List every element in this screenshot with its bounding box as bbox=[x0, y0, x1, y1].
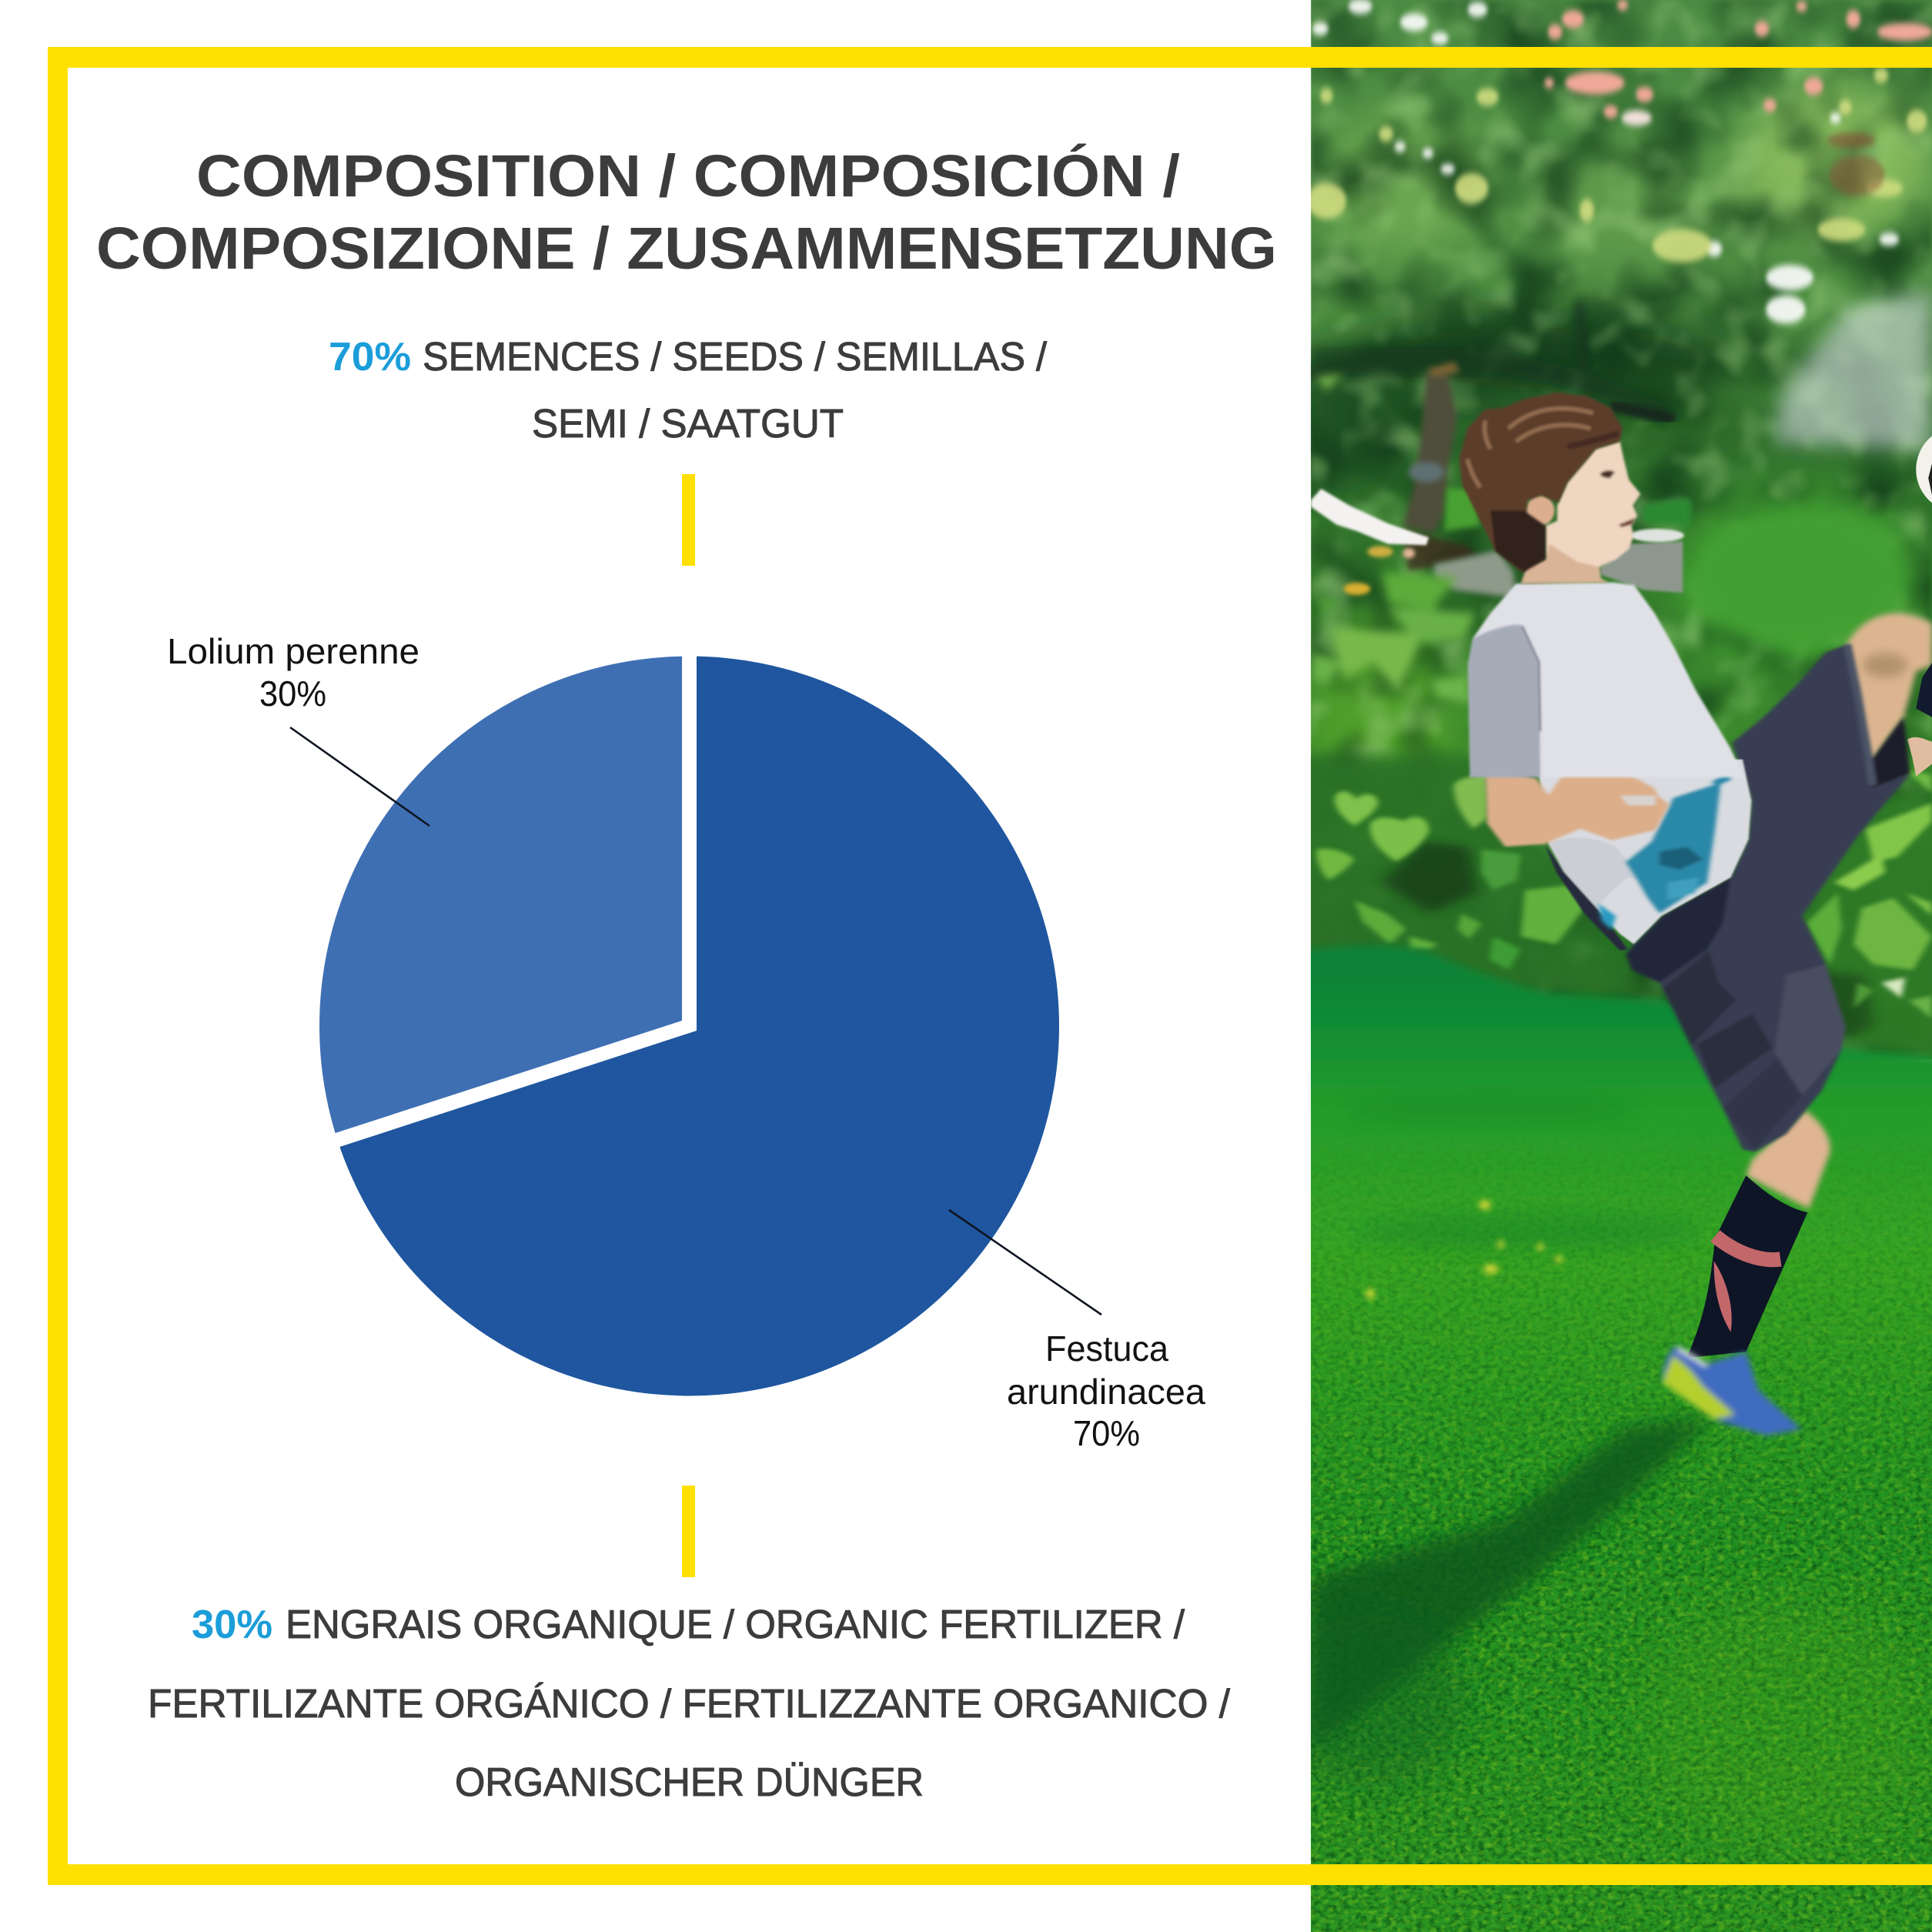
pie slice: Lolium perenne 30% bbox=[292, 616, 682, 1147]
other hand bbox=[1907, 737, 1932, 777]
divider: bottom yellow tick bbox=[682, 1486, 695, 1577]
photo: bokeh highlights and blossoms bbox=[1306, 0, 1932, 323]
photo background: blurred garden foliage bbox=[1294, 0, 1932, 1060]
blurred lawn behind the boy bbox=[1686, 503, 1912, 650]
label: Lolium perenne: 30% bbox=[259, 674, 326, 714]
photo: tree trunk, white cloth and grey tub around the head bbox=[1311, 346, 1690, 703]
football bbox=[1916, 426, 1932, 513]
football boot bbox=[1662, 1345, 1801, 1436]
photo: grass lawn bbox=[1269, 945, 1932, 1932]
text block: organic fertilizer 30% bbox=[148, 1603, 1231, 1805]
label: Festuca arundinacea: Festuca bbox=[1045, 1329, 1168, 1369]
mouth bbox=[1619, 518, 1636, 527]
photo: boy juggling a football on a green lawn bbox=[1269, 0, 1932, 1932]
label: Lolium perenne: Lolium perenne bbox=[167, 631, 419, 671]
photo: bush leaves behind legs bbox=[1287, 754, 1932, 1060]
leader line: Lolium perenne bbox=[290, 727, 430, 826]
pie slice: Festuca arundinacea 70% bbox=[292, 616, 1116, 1462]
arm and hand bbox=[1485, 734, 1670, 847]
text block: seeds 70%: 70% bbox=[329, 335, 411, 379]
face and neck bbox=[1521, 441, 1640, 583]
title bbox=[96, 143, 1277, 282]
text block: seeds 70%: SEMI / SAATGUT bbox=[532, 402, 844, 446]
divider: top yellow tick bbox=[682, 474, 695, 566]
text block: organic fertilizer 30%: ORGANISCHER DÜNGER bbox=[455, 1760, 924, 1805]
text block: seeds 70% bbox=[329, 335, 1048, 446]
title: COMPOSITION / COMPOSICIÓN / bbox=[196, 143, 1180, 209]
football sock bbox=[1686, 1175, 1807, 1358]
label: Festuca arundinacea: arundinacea bbox=[1007, 1372, 1205, 1412]
text block: organic fertilizer 30%: ENGRAIS ORGANIQUE / ORGANIC FERTILIZER / bbox=[286, 1603, 1185, 1647]
head and upper t-shirt bbox=[1459, 393, 1744, 777]
sock on raised foot bbox=[1916, 663, 1932, 717]
shirt print bbox=[1598, 770, 1731, 930]
knee and lower leg bbox=[1746, 1110, 1830, 1208]
text block: seeds 70%: SEMENCES / SEEDS / SEMILLAS / bbox=[423, 335, 1048, 379]
eye bbox=[1599, 470, 1615, 479]
hair bbox=[1459, 393, 1623, 572]
yellow flowers in the lawn bbox=[1365, 1200, 1563, 1299]
shadow of the boy on the lawn bbox=[1311, 1417, 1714, 1750]
raised leg, foot and football bbox=[1662, 426, 1932, 1436]
pie chart: seed mix bbox=[167, 616, 1205, 1462]
label: Festuca arundinacea: 70% bbox=[1073, 1413, 1140, 1453]
label: Festuca arundinacea bbox=[1007, 1329, 1205, 1453]
shorts bbox=[1626, 644, 1910, 1152]
t-shirt lower part bbox=[1536, 760, 1751, 951]
ear bbox=[1526, 496, 1555, 526]
label: Lolium perenne bbox=[167, 631, 419, 714]
panel: white background bbox=[0, 0, 1311, 1932]
text block: organic fertilizer 30%: 30% bbox=[192, 1603, 272, 1647]
leader line: Festuca arundinacea bbox=[949, 1210, 1101, 1315]
brick roof in the distance bbox=[1830, 155, 1885, 196]
title: COMPOSIZIONE / ZUSAMMENSETZUNG bbox=[96, 216, 1277, 282]
t-shirt upper part bbox=[1468, 583, 1744, 777]
raised thigh and knee bbox=[1847, 613, 1932, 764]
photo: dark branches bbox=[1309, 300, 1666, 415]
boy figure bbox=[1459, 393, 1932, 1436]
text block: organic fertilizer 30%: FERTILIZANTE ORGÁNICO / FERTILIZZANTE ORGANICO / bbox=[148, 1682, 1231, 1726]
distant building bbox=[1774, 289, 1932, 450]
torso, arm and shorts bbox=[1485, 644, 1910, 1152]
